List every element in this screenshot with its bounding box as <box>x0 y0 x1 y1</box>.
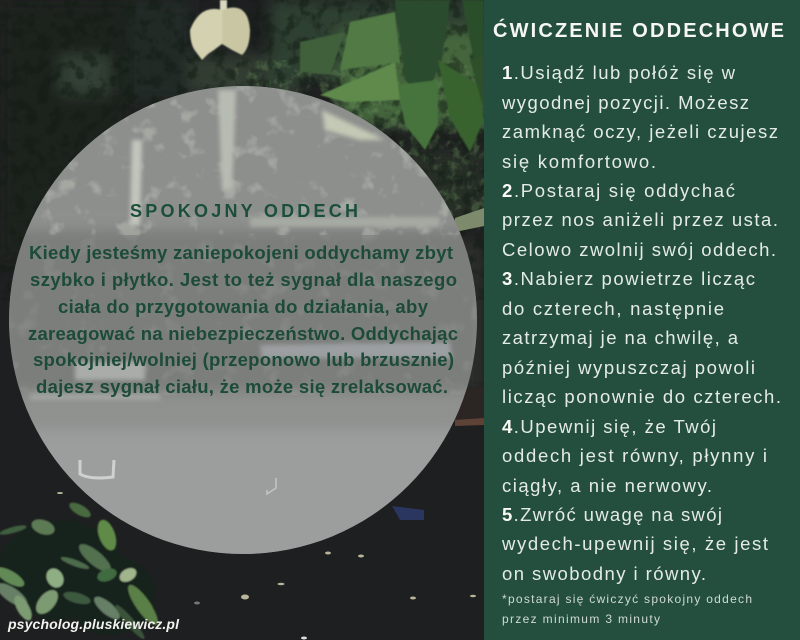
step 5: on swobodny i równy. <box>502 563 706 584</box>
step 1 <box>501 62 778 172</box>
step 4: 4.Upewnij się, że Twój <box>502 416 716 437</box>
footnote: *postaraj się ćwiczyć spokojny oddech <box>502 592 752 606</box>
circle body text: dajesz sygnał ciału, że może się zrelaksować. <box>36 376 448 397</box>
fern fronds <box>300 0 484 152</box>
step 3: później wypuszczaj powoli <box>502 357 755 378</box>
step 3: 3.Nabierz powietrze licząc <box>502 268 755 289</box>
step 1: zamknąć oczy, jeżeli czujesz <box>502 121 778 142</box>
circle body text: szybko i płytko. Jest to też sygnał dla naszego <box>30 269 457 290</box>
leaves bottom left <box>0 500 162 640</box>
panel heading: ĆWICZENIE ODDECHOWE <box>493 18 784 42</box>
step 4: ciągły, a nie nerwowy. <box>502 475 712 496</box>
website credit: psycholog.pluskiewicz.pl <box>7 616 180 632</box>
circle body text: zareagować na niebezpieczeństwo. Oddychając <box>28 323 458 344</box>
circle body text: ciała do przygotowania do działania, aby <box>58 296 429 317</box>
foliage reflected in the circle <box>0 85 484 395</box>
step 5: 5.Zwróć uwagę na swój <box>502 504 722 525</box>
step 5 <box>501 504 768 584</box>
step 2: 2.Postaraj się oddychać <box>502 180 735 201</box>
step 1: się komfortowo. <box>502 151 656 172</box>
circle heading: SPOKOJNY ODDECH <box>130 201 358 221</box>
step 1: 1.Usiądź lub połóż się w <box>502 62 736 83</box>
step 3 <box>502 268 781 407</box>
roof edge on right <box>455 208 484 426</box>
footnote <box>502 592 752 626</box>
step 2 <box>502 180 778 260</box>
step 2: przez nos aniżeli przez usta. <box>502 209 778 230</box>
pale chair shape <box>80 460 114 478</box>
circle body text: Kiedy jesteśmy zaniepokojeni oddychamy zbyt <box>29 242 453 263</box>
circle body text <box>28 242 458 397</box>
footnote: przez minimum 3 minuty <box>502 612 660 626</box>
ground specks <box>57 492 476 640</box>
step 4 <box>502 416 767 496</box>
panel: breathing exercise <box>484 0 800 640</box>
foliage texture <box>52 0 484 300</box>
hanging white flower <box>190 0 250 60</box>
blue object in shadow <box>392 506 424 520</box>
step 3: do czterech, następnie <box>502 298 724 319</box>
background forest photo <box>0 0 484 640</box>
translucent circle panel <box>0 80 484 562</box>
circle body text: spokojniej/wolniej (przeponowo lub brzusznie) <box>33 349 454 370</box>
step 4: oddech jest równy, płynny i <box>502 445 767 466</box>
step 1: wygodnej pozycji. Możesz <box>501 92 749 113</box>
step 5: wydech-upewnij się, że jest <box>501 533 768 554</box>
step 3: zatrzymaj je na chwilę, a <box>502 327 739 348</box>
step 3: licząc ponownie do czterech. <box>502 386 781 407</box>
step 2: Celowo zwolnij swój oddech. <box>502 239 776 260</box>
